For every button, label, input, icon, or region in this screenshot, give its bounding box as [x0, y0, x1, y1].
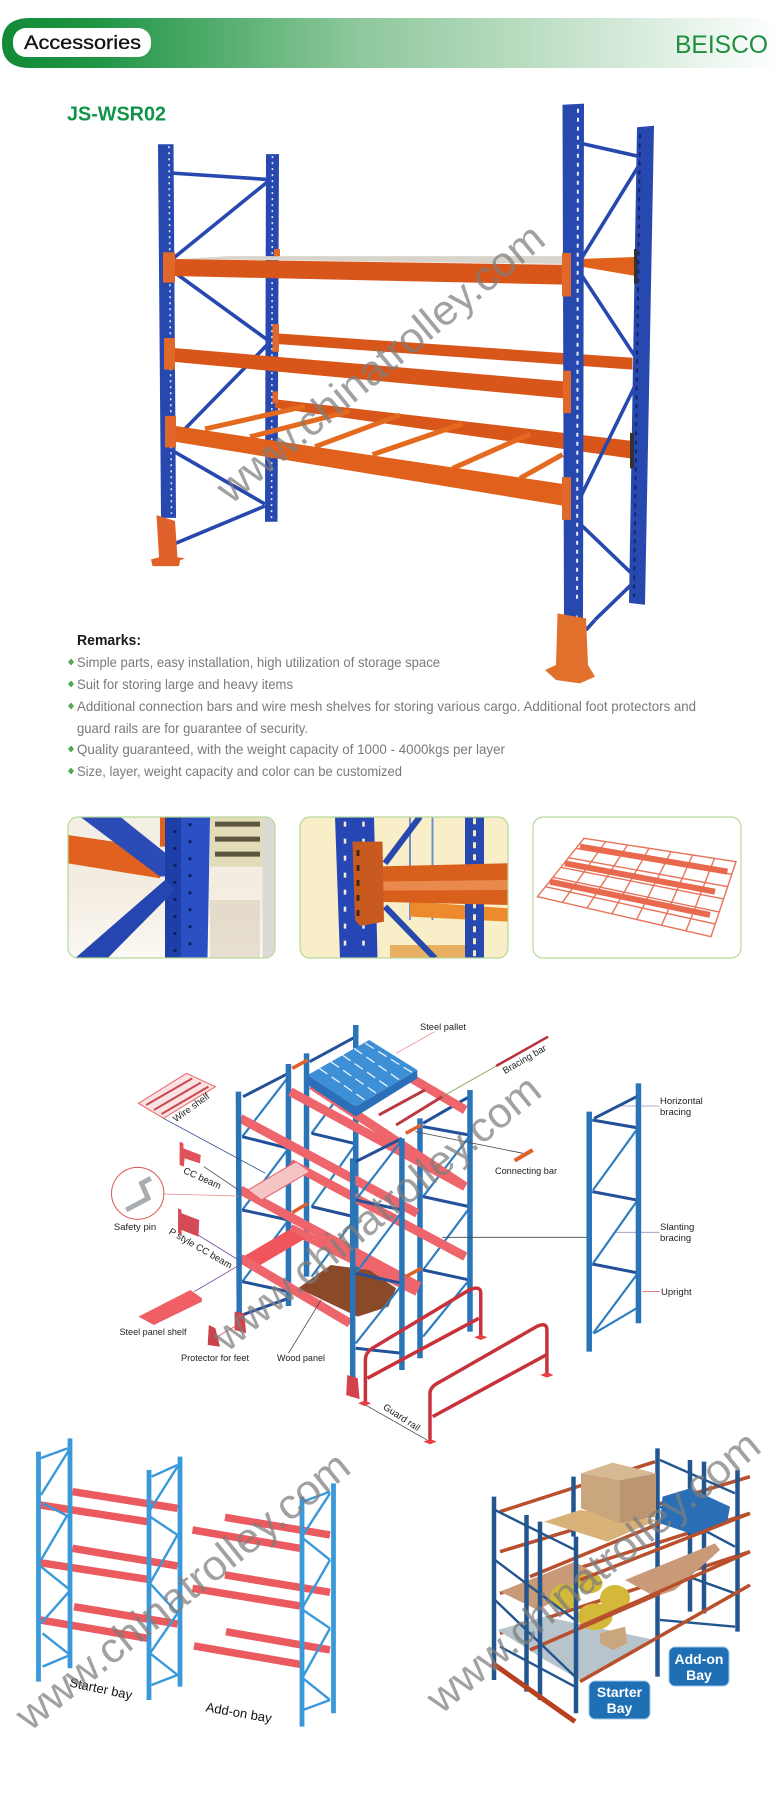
diagram labels: bracing: [660, 1233, 691, 1244]
icon: steel pallet: [308, 1040, 417, 1117]
remark lines: Size, layer, weight capacity and color can be customized: [77, 763, 402, 779]
badge: add-on bay: [669, 1647, 729, 1686]
red front beam: [240, 1258, 350, 1323]
diagram labels: bracing: [660, 1107, 691, 1118]
photo: pallet rack: [151, 104, 654, 683]
badge: starter bay: Starter: [597, 1684, 643, 1700]
diagram labels: Protector for feet: [181, 1353, 249, 1364]
bay uprights: [38, 1438, 334, 1727]
icon: connecting bar part: [515, 1150, 533, 1161]
cardboard decks: [500, 1543, 720, 1610]
photo panel: beam connector detail: [300, 817, 508, 958]
remark lines: [77, 654, 696, 779]
rack right frame: [562, 104, 654, 620]
photo panel: wire mesh shelf: [533, 817, 741, 958]
bay bracing: [40, 1448, 330, 1710]
leader lines: [163, 1032, 660, 1440]
diagram labels: P style CC beam: [167, 1226, 234, 1271]
diagram labels: Wood panel: [277, 1353, 325, 1364]
cargo: blue crate: [660, 1488, 730, 1535]
remark lines: Quality guaranteed, with the weight capacity of 1000 - 4000kgs per layer: [77, 741, 505, 757]
badge: add-on bay: Bay: [686, 1667, 712, 1683]
diagram labels: Wire shelf: [171, 1091, 212, 1125]
diagram labels: CC beam: [181, 1166, 223, 1192]
photo panel: upright and bracing detail: [68, 817, 275, 958]
remark lines: Suit for storing large and heavy items: [77, 676, 293, 692]
remark bullets: [68, 658, 74, 774]
illustration: loaded pallet rack: [492, 1448, 750, 1722]
diagram labels: Guard rail: [381, 1402, 422, 1434]
remark lines: Additional connection bars and wire mesh shelves for storing various cargo. Additional foot protectors and: [77, 698, 696, 714]
badge: add-on bay: Add-on: [675, 1651, 723, 1667]
remarks block: [68, 632, 696, 779]
separate upright frame: [589, 1083, 638, 1352]
header label: Accessories: [13, 28, 151, 57]
diagram labels: [114, 1022, 703, 1434]
icon: bracing bar part: [496, 1037, 548, 1066]
foot protectors on rack: [235, 1312, 360, 1399]
icon: protector for feet part: [208, 1325, 220, 1347]
diagram labels: Steel pallet: [420, 1022, 466, 1033]
watermarks: www.chinatrolley.com: [202, 1065, 550, 1361]
header banner: [2, 18, 780, 68]
guard rails: [358, 1288, 553, 1444]
diagram labels: Upright: [661, 1287, 692, 1298]
cargo: pallet: [544, 1510, 658, 1542]
icon: wire shelf installed: [248, 1162, 310, 1200]
badge: starter bay: Bay: [607, 1700, 633, 1716]
diagram labels: Safety pin: [114, 1222, 156, 1233]
bay labels: Starter bay: [68, 1675, 134, 1703]
cargo: yellow spools: [550, 1573, 630, 1630]
front structure: [492, 1497, 750, 1722]
badge: starter bay: [589, 1681, 650, 1719]
rack beams: [163, 249, 635, 506]
icon: steel panel installed: [240, 1230, 306, 1267]
model heading: JS-WSR02: [67, 104, 166, 126]
watermarks: www.chinatrolley.com: [206, 214, 553, 513]
rear structure: [500, 1448, 750, 1677]
icon: safety pin callout: [112, 1167, 164, 1219]
diagram labels: Steel panel shelf: [120, 1327, 187, 1338]
metal deck: [498, 1617, 655, 1680]
cargo: large box: [581, 1463, 656, 1523]
cargo: small box: [600, 1627, 628, 1650]
diagram: exploded rack components: [112, 1022, 703, 1444]
icon: steel panel shelf part: [138, 1290, 202, 1325]
bay beams: [40, 1492, 330, 1664]
diagram labels: Slanting: [660, 1222, 694, 1233]
rack front frame: [238, 1092, 402, 1397]
brand logo: BEISCO: BEISCO: [675, 31, 768, 59]
bay labels: Add-on bay: [205, 1699, 273, 1726]
watermarks: www.chinatrolley.com: [5, 1442, 359, 1740]
remarks heading: Remarks:: [77, 632, 141, 649]
remark lines: Simple parts, easy installation, high utilization of storage space: [77, 654, 440, 670]
diagram: starter and add-on bays: [38, 1438, 334, 1727]
rack right foot protector: [545, 600, 595, 683]
bay labels: [68, 1675, 273, 1726]
diagram labels: Connecting bar: [495, 1166, 557, 1177]
watermarks: www.chinatrolley.com: [416, 1421, 769, 1723]
header label: Accessories: Accessories: [24, 33, 141, 54]
icon: wire shelf part: [138, 1073, 215, 1118]
rack back frames: [242, 1025, 470, 1358]
remark lines: guard rails are for guarantee of security.: [77, 720, 308, 736]
diagram labels: Bracing bar: [501, 1043, 549, 1077]
icon: wood panel: [298, 1265, 396, 1317]
diagram labels: Horizontal: [660, 1096, 703, 1107]
icon: P style CC beam part: [178, 1208, 199, 1237]
rack left frame: [151, 144, 279, 566]
red beams: [240, 1060, 465, 1292]
icon: CC beam part: [180, 1142, 201, 1167]
